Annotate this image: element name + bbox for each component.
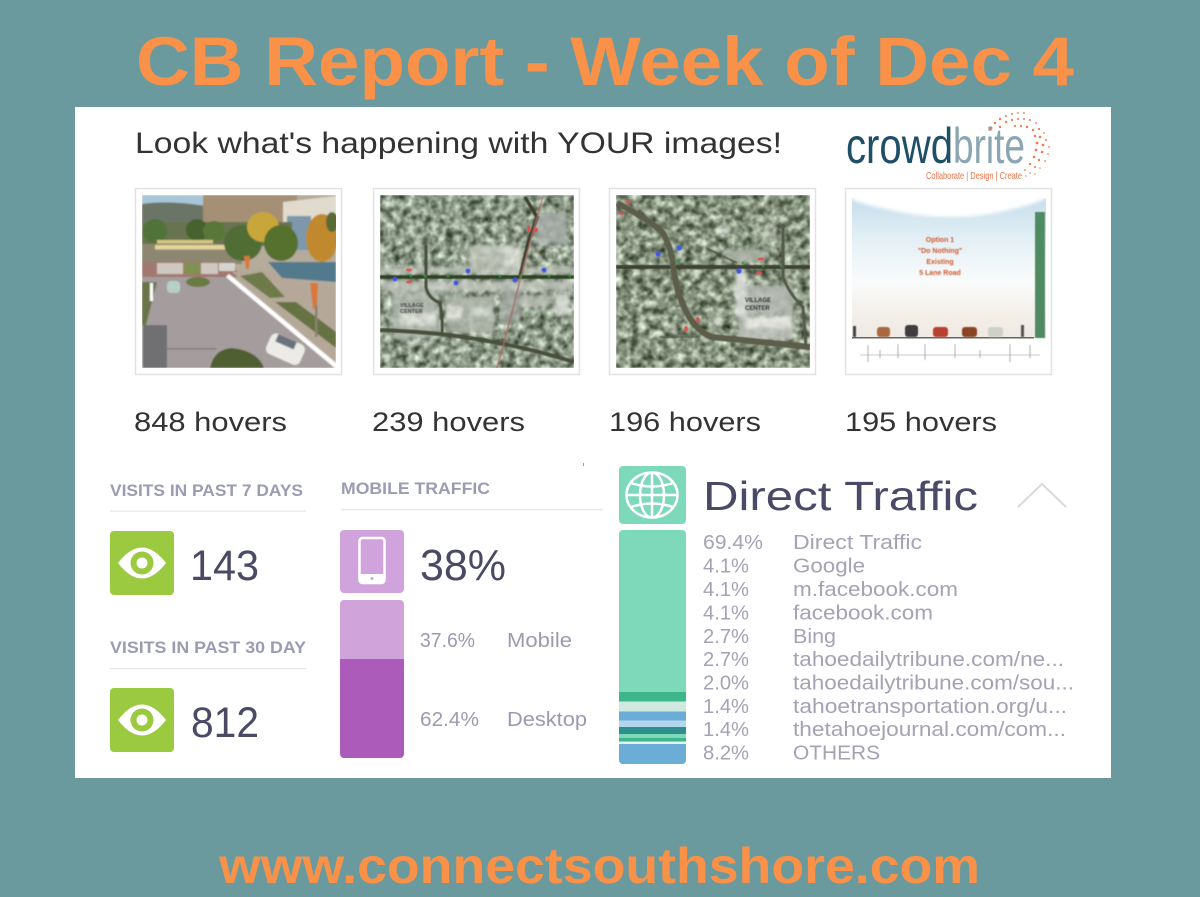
stacked bar: mobile vs desktop [340, 600, 404, 758]
image card: street rendering [136, 188, 342, 374]
image card: aerial map one [374, 188, 580, 374]
image card: street section: Existing [926, 259, 954, 266]
source percentages: 69.4% [703, 532, 763, 554]
source names [793, 532, 1074, 764]
image card: street section: Option 1 [926, 237, 954, 244]
source percentages: 1.4% [703, 719, 749, 741]
stat: visits in past 7 days: VISITS IN PAST 7 DAYS [110, 481, 303, 500]
stat: visits in past 7 days: 143 [190, 542, 259, 590]
logo: crowdbrite: brite [953, 118, 1025, 174]
source names: tahoetransportation.org/u... [793, 696, 1067, 718]
hover counts: 848 hovers [134, 407, 287, 437]
legend: mobile share [420, 630, 572, 652]
hover counts: 196 hovers [609, 407, 761, 437]
source percentages [703, 532, 763, 764]
source names: m.facebook.com [793, 579, 958, 601]
title: CB Report - Week of Dec 4 [136, 23, 1074, 100]
source percentages: 2.7% [703, 626, 749, 648]
icon: phone [340, 530, 404, 593]
image card: street section [846, 188, 1052, 374]
image card: aerial map one: VILLAGE [400, 303, 424, 309]
stat: visits in past 30 days: VISITS IN PAST 30 DAY [110, 638, 307, 657]
image card: street section: 5 Lane Road [919, 270, 961, 277]
heading: images: Look what's happening with YOUR images! [135, 127, 782, 160]
footer url: www.connectsouthshore.com [218, 838, 980, 894]
legend: desktop share [420, 709, 587, 731]
source percentages: 4.1% [703, 579, 749, 601]
source names: tahoedailytribune.com/sou... [793, 672, 1074, 694]
stat: visits in past 30 days [110, 638, 307, 752]
panel: mobile traffic [340, 479, 603, 758]
image card: street section: "Do Nothing" [918, 248, 962, 255]
icon: eye [110, 688, 174, 752]
panel: mobile traffic: 38% [420, 541, 506, 590]
legend: mobile share: 37.6% [420, 630, 475, 652]
icon: globe [619, 466, 686, 524]
stacked bar: traffic sources [619, 530, 686, 764]
source names: facebook.com [793, 602, 933, 624]
image card: aerial map two [610, 188, 816, 374]
icon: eye [110, 531, 174, 595]
hover counts [134, 407, 997, 437]
source percentages: 1.4% [703, 696, 749, 718]
image card: aerial map two: VILLAGE [745, 298, 771, 304]
heading: direct traffic: Direct Traffic [703, 473, 978, 519]
source names: thetahoejournal.com/com... [793, 719, 1066, 741]
source percentages: 2.0% [703, 672, 749, 694]
stat: visits in past 30 days: 812 [191, 699, 259, 747]
legend: desktop share: Desktop [507, 709, 587, 731]
panel: direct traffic [619, 466, 1074, 764]
source names: Bing [793, 626, 836, 648]
source names: Direct Traffic [793, 532, 922, 554]
logo: crowdbrite: crowd [846, 118, 953, 174]
source percentages: 8.2% [703, 742, 749, 764]
icon: collapse chevron [1018, 484, 1066, 507]
panel: mobile traffic: MOBILE TRAFFIC [341, 479, 490, 498]
source percentages: 2.7% [703, 649, 749, 671]
source names: Google [793, 556, 865, 578]
logo: crowdbrite: Collaborate | Design | Create [926, 170, 1022, 182]
source percentages: 4.1% [703, 556, 749, 578]
source names: OTHERS [793, 742, 880, 764]
source percentages: 4.1% [703, 602, 749, 624]
panel: report card [75, 107, 1111, 778]
source names: tahoedailytribune.com/ne... [793, 649, 1064, 671]
hover counts: 239 hovers [372, 407, 525, 437]
logo: crowdbrite [846, 112, 1050, 182]
legend: desktop share: 62.4% [420, 709, 479, 731]
image card: aerial map two: CENTER [745, 306, 770, 312]
hover counts: 195 hovers [845, 407, 997, 437]
legend: mobile share: Mobile [507, 630, 572, 652]
image card: aerial map one: CENTER [400, 309, 423, 315]
stat: visits in past 7 days [110, 481, 306, 595]
